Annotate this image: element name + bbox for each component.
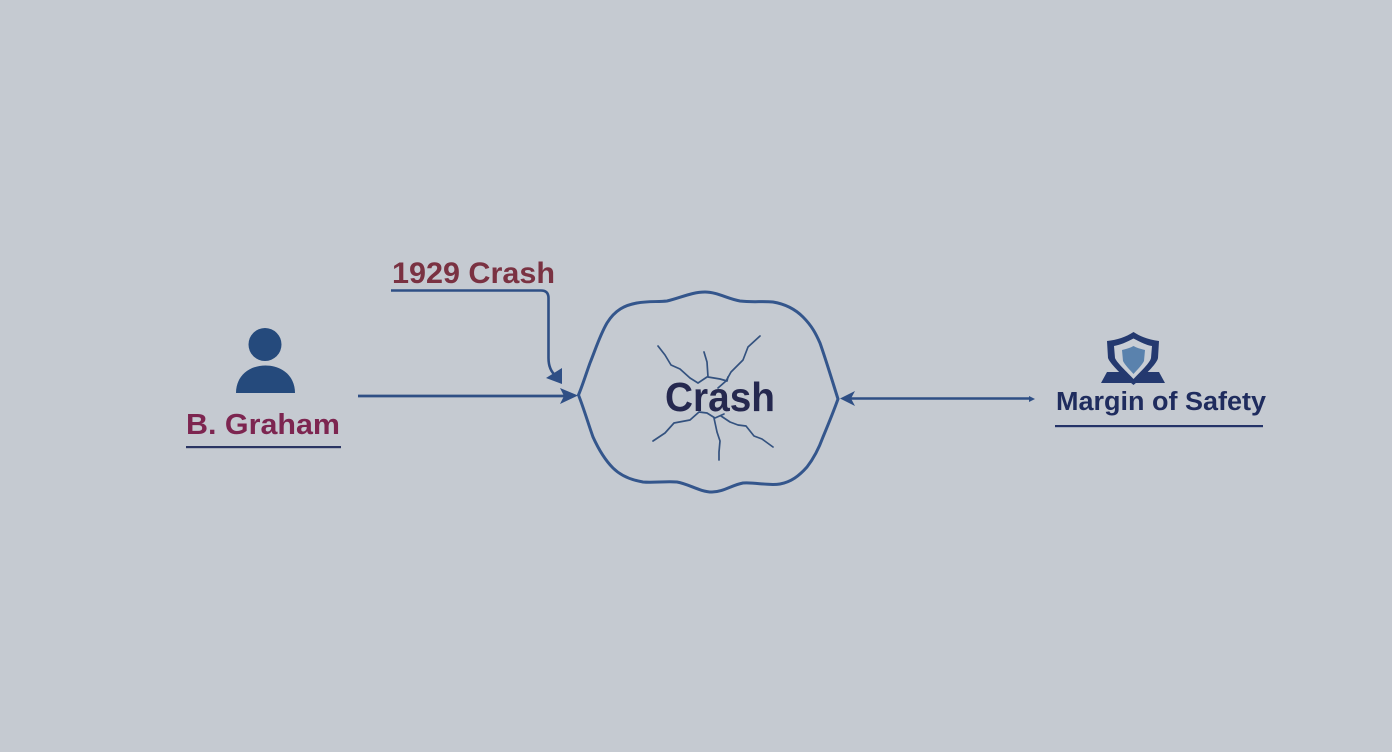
center label: Crash: Crash: [665, 374, 775, 420]
arrow: B. Graham to crash shape: [358, 388, 578, 404]
arrow: Margin of Safety to crash shape: [840, 391, 1035, 406]
crash shape outline: [578, 292, 838, 492]
arrow: 1929 Crash to crash shape: [391, 290, 562, 384]
label: 1929 Crash: 1929 Crash: [392, 257, 555, 290]
label: Margin of Safety: Margin of Safety: [1056, 388, 1267, 416]
icon: person: [236, 328, 295, 393]
icon: shield: [1101, 332, 1165, 385]
crack lines: [653, 336, 773, 460]
label: B. Graham: B. Graham: [186, 409, 340, 441]
